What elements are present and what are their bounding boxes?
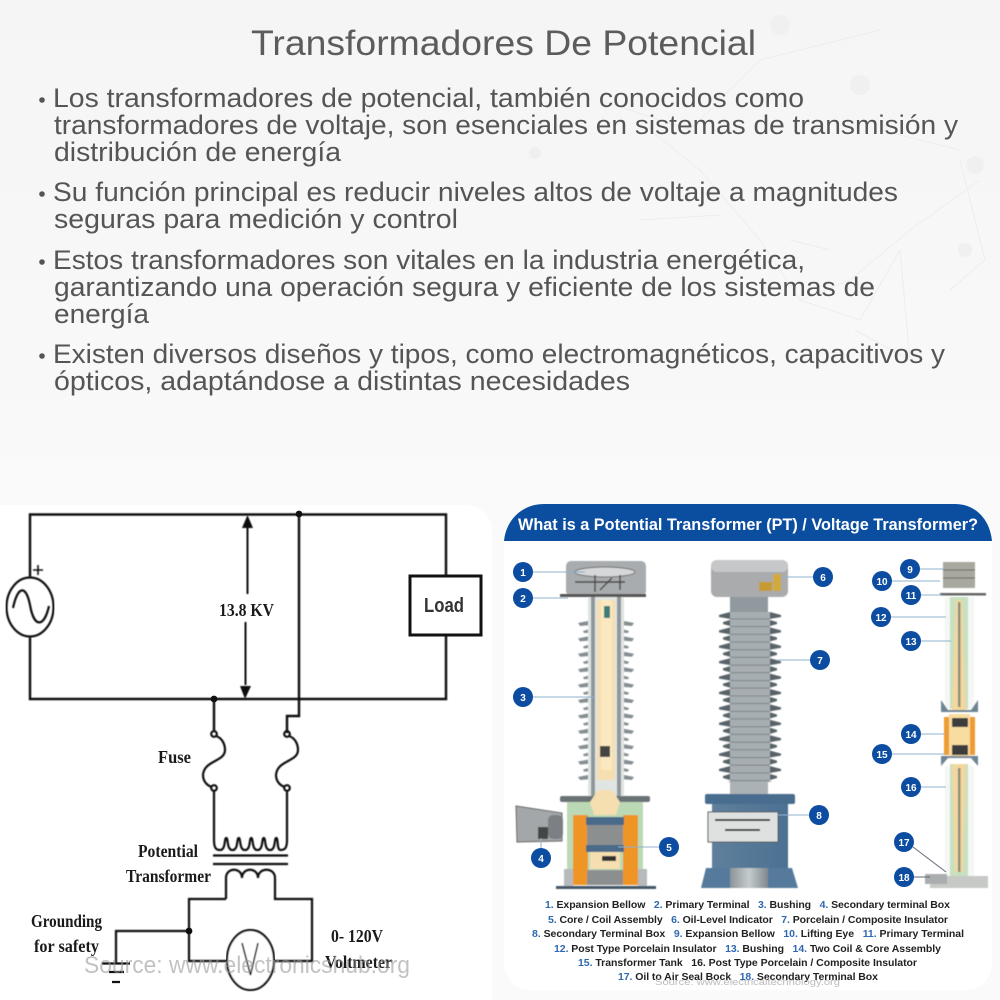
numbered badges: 2 bbox=[520, 594, 526, 605]
parts legend: 1. Expansion Bellow 2. Primary Terminal 3. Bushing 4. Secondary terminal Box bbox=[545, 899, 950, 911]
bullet 3: energía bbox=[54, 299, 150, 329]
parts legend: 8. Secondary Terminal Box 9. Expansion Bellow 10. Lifting Eye 11. Primary Terminal bbox=[532, 928, 964, 940]
bullet 3 bbox=[39, 245, 875, 329]
parts legend: 15. Transformer Tank 16. Post Type Porcelain / Composite Insulator bbox=[578, 957, 917, 969]
transformer core and secondary coil bbox=[116, 856, 312, 963]
numbered badges: 11 bbox=[906, 591, 917, 602]
bullet 1: distribución de energía bbox=[54, 137, 342, 167]
transformer 3: slim cutaway bbox=[925, 562, 988, 888]
icon: ground bbox=[102, 964, 130, 982]
junction dots bbox=[186, 511, 302, 934]
bullet list bbox=[39, 83, 959, 396]
bullet 3: garantizando una operación segura y eficiente de los sistemas de bbox=[54, 272, 875, 302]
numbered badges: 1 bbox=[520, 568, 526, 579]
parts legend bbox=[532, 899, 964, 983]
leader lines bbox=[533, 569, 951, 877]
source watermark: Source: www.electronicshub.org bbox=[84, 952, 410, 979]
numbered badges: 16 bbox=[905, 783, 917, 794]
numbered badges: 5 bbox=[666, 843, 672, 854]
fuses bbox=[203, 731, 298, 850]
icon: voltmeter bbox=[227, 930, 274, 990]
numbered badges: 3 bbox=[520, 693, 526, 704]
numbered badges: 17 bbox=[898, 838, 910, 849]
numbered badges: 13 bbox=[905, 637, 917, 648]
label: 0-120V Voltmeter: 0- 120V bbox=[331, 926, 383, 946]
bullet 1: transformadores de voltaje, son esenciales en sistemas de transmisión y bbox=[54, 110, 959, 140]
voltage arrow bbox=[240, 515, 253, 699]
numbered badges bbox=[513, 559, 921, 887]
numbered badges: 10 bbox=[876, 577, 888, 588]
bullet 2 bbox=[39, 177, 898, 234]
bullet 2: Su función principal es reducir niveles altos de voltaje a magnitudes bbox=[53, 177, 898, 207]
label: Grounding for safety bbox=[31, 911, 102, 956]
label: Potential Transformer: Potential bbox=[138, 841, 198, 861]
bullet 1: Los transformadores de potencial, también conocidos como bbox=[53, 83, 804, 113]
main circuit wires bbox=[30, 514, 446, 733]
load box bbox=[410, 576, 481, 635]
label: Potential Transformer bbox=[126, 841, 211, 886]
label: 0-120V Voltmeter bbox=[325, 926, 392, 972]
title: Transformadores De Potencial bbox=[251, 24, 756, 63]
numbered badges: 15 bbox=[876, 750, 888, 761]
header banner bbox=[504, 504, 992, 541]
bullet 2: seguras para medición y control bbox=[54, 204, 458, 234]
panel: potential transformer infographic bbox=[504, 504, 992, 990]
bullet 3: Estos transformadores son vitales en la industria energética, bbox=[53, 245, 805, 275]
label: Grounding for safety: for safety bbox=[34, 936, 99, 956]
parts legend: 5. Core / Coil Assembly 6. Oil-Level Indicator 7. Porcelain / Composite Insulator bbox=[548, 914, 948, 926]
bullet 4 bbox=[39, 339, 946, 396]
numbered badges: 4 bbox=[538, 854, 544, 865]
numbered badges: 9 bbox=[907, 565, 913, 576]
parts legend: 12. Post Type Porcelain Insulator 13. Bushing 14. Two Coil & Core Assembly bbox=[554, 943, 941, 955]
numbered badges: 7 bbox=[817, 656, 823, 667]
bullet 1 bbox=[39, 83, 959, 167]
parts legend: 17. Oil to Air Seal Bock 18. Secondary Terminal Box bbox=[618, 971, 878, 983]
transformer 1: cutaway bbox=[516, 561, 656, 889]
bullet 4: Existen diversos diseños y tipos, como electromagnéticos, capacitivos y bbox=[53, 339, 946, 369]
transformer 2: exterior bbox=[701, 560, 798, 888]
label: 0-120V Voltmeter: Voltmeter bbox=[325, 952, 392, 972]
numbered badges: 18 bbox=[898, 873, 910, 884]
label: 13.8 KV: 13.8 KV bbox=[219, 600, 274, 620]
numbered badges: 6 bbox=[820, 573, 826, 584]
numbered badges: 8 bbox=[816, 811, 822, 822]
label: Fuse: Fuse bbox=[158, 747, 191, 767]
source watermark: Source: www.electricaltechnology.org bbox=[655, 977, 840, 987]
background network pattern bbox=[529, 15, 985, 360]
panel: circuit diagram bbox=[0, 505, 492, 1000]
numbered badges: 12 bbox=[875, 613, 887, 624]
label: Potential Transformer: Transformer bbox=[126, 866, 211, 886]
icon: AC source bbox=[6, 565, 54, 636]
numbered badges: 14 bbox=[905, 730, 917, 741]
header banner: What is a Potential Transformer (PT) / Voltage Transformer? bbox=[518, 515, 978, 534]
label: Grounding for safety: Grounding bbox=[31, 911, 102, 931]
load box: Load bbox=[424, 595, 464, 617]
bullet 4: ópticos, adaptándose a distintas necesidades bbox=[54, 366, 630, 396]
